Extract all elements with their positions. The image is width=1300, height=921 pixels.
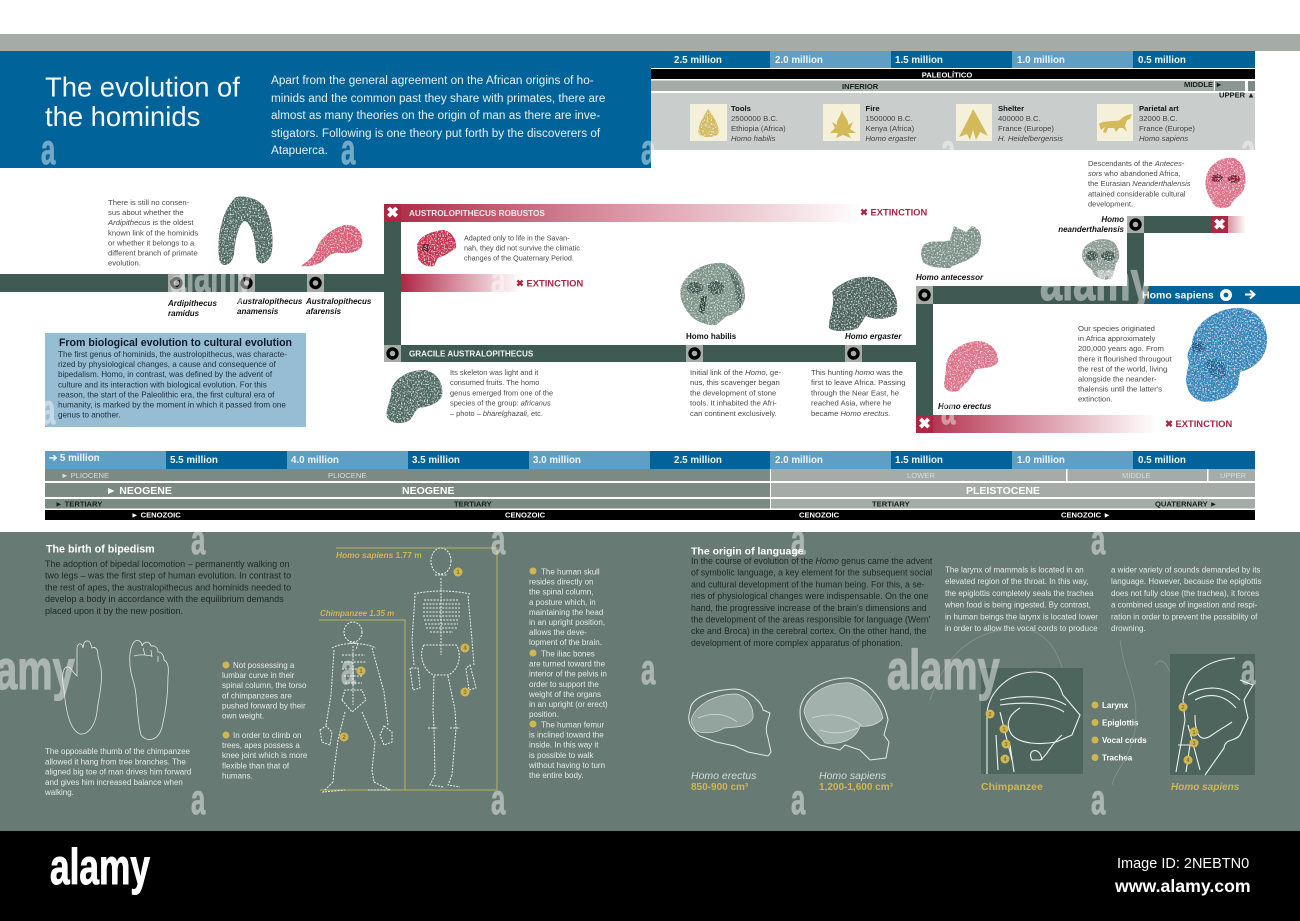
- text: bipedism intro: two legs – was the first step of human evolution. In contrast to: [45, 571, 291, 581]
- text: neanderthal note: Descendants of the Anteces-: [1088, 159, 1184, 168]
- text: chimpanzee notes: pushed forward by their: [222, 701, 306, 710]
- label: homo sapiens diagram: Homo sapiens: [1171, 782, 1240, 793]
- cenozoic row: CENOZOIC: [799, 510, 840, 520]
- text: robustos note: Adapted only to life in the Savan-: [464, 234, 570, 242]
- text: homo ergaster note: became Homo erectus.: [811, 409, 890, 418]
- text: human skeleton notes: a posture which, in: [529, 598, 596, 607]
- callouts: skeleton numbered markers: 1: [359, 669, 363, 675]
- text: human skeleton notes: interior of the pelvis in: [529, 670, 607, 679]
- watermark marks: a: [191, 515, 206, 564]
- text: homo sapiens note: Our species originated: [1078, 324, 1155, 333]
- title: The evolution of: [45, 72, 240, 102]
- illustration: homo sapiens brain: [800, 678, 889, 760]
- skull: robustus: [417, 230, 456, 267]
- extinction branch: robustos: [384, 204, 927, 222]
- text: homo sapiens note: in Africa approximately: [1078, 334, 1155, 343]
- text: neanderthal note: development.: [1088, 199, 1133, 208]
- milestone text: fire: 1500000 B.C.: [866, 114, 913, 123]
- text: ardipithecus note: known link of the hominids: [108, 228, 198, 237]
- intro text: minids and the common past they share with primates, there are: [271, 92, 606, 105]
- label: homo antecessor: Homo antecessor: [916, 273, 984, 282]
- text: ardipithecus note: sus about whether the: [108, 208, 184, 217]
- text: larynx column one: in order to allow the vocal cords to produce: [945, 624, 1098, 633]
- label: homo neanderthalensis: neanderthalensis: [1058, 225, 1125, 234]
- period row: [45, 483, 1255, 497]
- skull: homo erectus: [944, 341, 998, 392]
- text: chimpanzee notes: In order to climb on: [233, 731, 301, 740]
- label: homo sapiens height: Homo sapiens 1.77 m: [336, 550, 422, 560]
- legend: larynx parts: Larynx: [1102, 701, 1129, 710]
- text: larynx column one: in human beings the larynx is located lower: [945, 612, 1098, 621]
- text: homo sapiens note: there it flourished througout: [1078, 354, 1172, 363]
- illustration: homo sapiens vocal tract: 3: [1192, 741, 1196, 747]
- callouts: skeleton numbered markers: 4: [463, 646, 467, 652]
- period row: NEOGENE: [402, 485, 455, 497]
- label: ardipithecus ramidus: ramidus: [168, 309, 200, 318]
- milestone text: fire: Kenya (Africa): [866, 124, 915, 133]
- text: homo habilis note: Initial link of the Homo, ge-: [690, 368, 781, 377]
- illustration: chimpanzee hand and human foot: [63, 640, 168, 740]
- skull: neanderthal red: [1205, 158, 1246, 208]
- panel: from biological evolution to cultural evolution: rized by physiological changes, a cause and consequence of: [58, 360, 277, 369]
- watermark marks: a: [791, 515, 806, 564]
- watermark marks: a: [941, 385, 956, 434]
- cenozoic row: [45, 510, 1255, 520]
- watermark marks: a: [641, 645, 656, 694]
- panel: from biological evolution to cultural evolution: culture and its interaction with biological evolution. For this: [58, 380, 267, 389]
- text: chimpanzee notes: of chimpanzees are: [222, 691, 292, 700]
- illustration: homo sapiens vocal tract: 4: [1186, 758, 1190, 764]
- top time scale: 2.5 million: [674, 55, 722, 66]
- extinction branch: homo erectus: ✖: [918, 416, 931, 432]
- illustration: homo sapiens vocal tract: 1: [1192, 730, 1196, 736]
- evolution tree lines: [0, 204, 1300, 416]
- icon: shelter: [956, 104, 992, 141]
- label: australopithecus afarensis: afarensis: [306, 307, 342, 316]
- label: australopithecus anamensis: Australopithecus: [236, 297, 303, 306]
- epoch row: [45, 469, 1255, 481]
- callouts: skeleton numbered markers: 3: [463, 690, 467, 696]
- epoch row: ► PLIOCENE: [61, 471, 109, 480]
- text: larynx column two: does not fully close (the trachea), it forces: [1111, 589, 1259, 598]
- epoch row: UPPER: [1220, 471, 1247, 480]
- era row: ► TERTIARY: [55, 500, 102, 508]
- text: hand and foot caption: The opposable thumb of the chimpanzee: [45, 747, 191, 756]
- panel: bottom background: [0, 532, 1300, 831]
- text: human skeleton notes: is possible to walk: [529, 751, 594, 760]
- milestone text: shelter: H. Heidelbergensis: [998, 134, 1063, 143]
- panel: from biological evolution to cultural evolution: reason, the start of the Paleolithic era, the first cultural era of: [58, 390, 275, 399]
- bottom time scale: 1.0 million: [1017, 455, 1065, 466]
- illustration: homo erectus brain: [689, 689, 771, 756]
- milestone text: parietal art: France (Europe): [1139, 124, 1195, 133]
- label: homo ergaster: Homo ergaster: [845, 332, 902, 341]
- extinction branch: homo erectus: [916, 415, 1232, 433]
- illustration: homo sapiens vocal tract: [1112, 640, 1255, 785]
- extinction branch: early australopithecus: ✖ EXTINCTION: [516, 278, 583, 288]
- epoch row: LOWER: [907, 471, 935, 480]
- panel: cultural milestones: [651, 90, 1255, 150]
- milestone text: tools: 2500000 B.C.: [731, 114, 778, 123]
- text: hand and foot caption: and gives him increased balance when: [45, 778, 183, 787]
- legend: larynx parts: Epiglottis: [1102, 718, 1139, 728]
- legend: larynx parts: Trachea: [1102, 754, 1133, 762]
- icon: parietal art: [1097, 104, 1133, 141]
- epoch row: MIDDLE: [1122, 471, 1151, 480]
- text: larynx column two: language. However, because the epiglottis: [1111, 577, 1261, 586]
- bottom time scale: 3.0 million: [533, 455, 581, 466]
- bottom time scale: ➔ 5 million: [49, 453, 100, 464]
- extinction branch: robustos: ✖: [386, 204, 399, 222]
- text: homo habilis note: tools. It inhabited the Afri-: [690, 399, 777, 408]
- label: homo sapiens on timeline: Homo sapiens: [1142, 290, 1214, 302]
- title: the hominids: [45, 101, 200, 132]
- text: larynx column two: ration in order to prevent the possibility of: [1111, 612, 1258, 621]
- watermark marks: a: [341, 125, 356, 174]
- watermark marks: a: [1241, 645, 1256, 694]
- text: bipedism intro: The adoption of bipedal locomotion – permanently walking on: [45, 559, 290, 569]
- text: human skeleton notes: is inclined toward the: [529, 731, 604, 740]
- heading: the birth of bipedism: The birth of bipedism: [46, 544, 155, 556]
- text: human skeleton notes: [528, 568, 608, 780]
- label: homo erectus capacity: Homo erectus: [691, 770, 757, 782]
- illustration: chimpanzee vocal tract: 3: [1004, 742, 1008, 748]
- panel: cultural milestones: UPPER ▲: [1219, 90, 1255, 100]
- watermark marks: a: [1241, 125, 1256, 174]
- text: homo habilis note: nus, this scavenger began: [690, 378, 780, 387]
- text: human skeleton notes: order to support the: [529, 680, 599, 689]
- watermark marks: alamy: [1040, 250, 1153, 313]
- text: larynx column one: the epiglottis completely seals the trachea: [945, 589, 1094, 598]
- text: language intro: In the course of evolution of the Homo genus came the advent: [691, 556, 932, 566]
- text: larynx column one: when food is being ingested. By contrast,: [944, 601, 1091, 610]
- text: chimpanzee notes: lumbar curve in their: [222, 671, 295, 680]
- bottom time scale: 2.5 million: [674, 455, 722, 466]
- text: human skeleton notes: The iliac bones: [541, 650, 595, 658]
- text: homo ergaster note: through the Near East, he: [811, 388, 899, 397]
- text: neanderthal note: the Eurasian Neanderthalensis: [1088, 179, 1191, 188]
- text: larynx column one: elevated region of the throat. In this way,: [945, 577, 1088, 586]
- text: gracile note: – photo – bharelghazali, etc.: [450, 409, 543, 418]
- watermark marks: a: [191, 775, 206, 824]
- milestone text: tools: Ethiopia (Africa): [731, 124, 786, 133]
- illustration: chimpanzee vocal tract: [930, 629, 1083, 774]
- skull: gracile: [387, 370, 442, 423]
- milestone text: parietal art: 32000 B.C.: [1139, 114, 1177, 123]
- epoch row: PLIOCENE: [328, 471, 366, 480]
- watermark marks: a: [41, 385, 56, 434]
- label: homo habilis: Homo habilis: [686, 332, 737, 341]
- text: human skeleton notes: the entire body.: [529, 771, 584, 780]
- text: human skeleton notes: inside. In this way it: [529, 741, 599, 750]
- illustration: chimpanzee vocal tract: 1: [1002, 727, 1006, 733]
- watermark marks: a: [341, 645, 356, 694]
- text: homo sapiens note: 200,000 years ago. From: [1078, 344, 1164, 353]
- illustration: chimpanzee skeleton: [320, 622, 392, 792]
- text: chimpanzee notes: spinal column, the torso: [222, 681, 307, 690]
- text: gracile note: species of the group: africanus: [450, 399, 551, 408]
- top time scale: 2.0 million: [775, 55, 823, 66]
- milestone text: shelter: Shelter: [998, 104, 1024, 113]
- panel: from biological evolution to cultural evolution: From biological evolution to cultural evolution: [59, 337, 292, 349]
- label: chimpanzee diagram: Chimpanzee: [981, 781, 1043, 793]
- text: neanderthal note: attained considerable cultural: [1088, 189, 1186, 198]
- panel: from biological evolution to cultural evolution: bipedalism. Homo, in contrast, was defined by the advent of: [58, 370, 273, 379]
- text: human skeleton notes: resides directly on: [529, 578, 593, 587]
- label: homo erectus capacity: 850-900 cm³: [691, 782, 749, 793]
- watermark marks: a: [1091, 515, 1106, 564]
- text: chimpanzee notes: flexible than that of: [222, 761, 290, 770]
- bottom time scale: 2.0 million: [775, 455, 823, 466]
- bottom time scale: 0.5 million: [1138, 455, 1186, 466]
- text: human skeleton notes: weight of the organs: [528, 690, 601, 699]
- text: homo ergaster note: first to leave Africa. Passing: [811, 378, 905, 387]
- icon: fire: [823, 104, 860, 141]
- text: language intro: development of more complex apparatus of phonation.: [691, 638, 903, 648]
- text: language intro: ries of physiological changes were indispensable. On the one: [691, 591, 929, 601]
- text: gracile note: Its skeleton was light and it: [450, 368, 538, 377]
- milestone text: fire: Fire: [866, 104, 880, 113]
- watermark marks: [0, 125, 1256, 824]
- label: homo sapiens capacity: [819, 770, 894, 793]
- label: ardipithecus ramidus: Ardipithecus: [167, 299, 217, 308]
- text: homo sapiens note: extinction.: [1078, 395, 1113, 404]
- extinction branch: early australopithecus: [401, 274, 583, 292]
- text: gracile note: genus emerged from one of the: [450, 388, 553, 397]
- text: homo ergaster note: This hunting homo was the: [811, 368, 903, 377]
- text: robustos note: changes of the Quaternary Period.: [464, 254, 574, 262]
- text: human skeleton notes: are turned toward the: [529, 660, 606, 669]
- skull: homo neanderthalensis grey: [1082, 239, 1119, 280]
- text: larynx column one: The larynx of mammals is located in an: [945, 566, 1084, 574]
- bottom time scale: 4.0 million: [291, 455, 339, 466]
- text: language intro: cke and Broca) in the cerebral cortex. On the other hand, the: [691, 626, 927, 636]
- top time scale: [651, 51, 1255, 91]
- text: hand and foot caption: walking.: [44, 788, 74, 797]
- text: language intro: hand, the progressive increase of the brain's dimensions and: [691, 603, 927, 613]
- text: hand and foot caption: allowed it hang from tree branches. The: [45, 757, 186, 766]
- watermark marks: a: [41, 125, 56, 174]
- text: ardipithecus note: evolution.: [108, 259, 141, 268]
- label: homo neanderthalensis: Homo: [1101, 215, 1124, 224]
- callouts: skeleton numbered markers: 1: [456, 570, 460, 576]
- text: bipedism intro: placed upon it by the new position.: [45, 606, 183, 616]
- text: homo sapiens note: alongside the neander-: [1078, 374, 1157, 384]
- text: bipedism intro: the rest of apes, the australopithecus and hominids needed to: [45, 582, 291, 592]
- callouts: skeleton numbered markers: 2: [342, 735, 346, 741]
- text: ardipithecus note: different branch of primate: [108, 248, 198, 258]
- text: hand and foot caption: aligned big toe of man drives him forward: [45, 768, 191, 777]
- panel: from biological evolution to cultural evolution: [45, 333, 306, 427]
- text: human skeleton notes: allows the deve-: [529, 628, 587, 637]
- era row: QUATERNARY ►: [1155, 500, 1217, 508]
- text: chimpanzee notes: [222, 661, 308, 780]
- label: homo sapiens capacity: Homo sapiens: [819, 770, 887, 782]
- text: language intro: and cultural development of the human being. For this, a se-: [691, 579, 925, 589]
- footer image id: Image ID: 2NEBTN0: [1117, 856, 1249, 872]
- milestone text: parietal art: Homo sapiens: [1139, 134, 1188, 143]
- label: homo sapiens capacity: 1,200-1,600 cm³: [819, 782, 894, 793]
- top time scale: PALEOLÍTICO: [922, 70, 972, 80]
- intro text: stigators. Following is one theory put forth by the discoverers of: [271, 127, 601, 140]
- watermark marks: a: [641, 125, 656, 174]
- text: human skeleton notes: The human skull: [541, 568, 600, 576]
- text: human skeleton notes: in an upright position,: [529, 618, 605, 627]
- watermark marks: alamy: [170, 247, 252, 303]
- text: language intro: of symbolic language, a key element for the subsequent social: [691, 568, 932, 578]
- intro text: Apart from the general agreement on the African origins of ho-: [271, 74, 594, 87]
- top time scale: INFERIOR: [842, 82, 879, 91]
- text: chimpanzee notes: trees, apes possess a: [222, 741, 300, 750]
- label: homo erectus capacity: [691, 770, 757, 793]
- fossil: afarensis jaw: [301, 225, 362, 266]
- fossil: ardipithecus jaw: [218, 196, 273, 265]
- milestone text: parietal art: Parietal art: [1139, 104, 1179, 113]
- text: human skeleton notes: position.: [529, 710, 559, 719]
- fossil: homo antecessor: [921, 226, 981, 268]
- watermark marks: a: [491, 775, 506, 824]
- text: homo ergaster note: reached Asia, where he: [811, 399, 891, 408]
- extinction branch: homo erectus: ✖ EXTINCTION: [1165, 418, 1232, 429]
- skull: homo sapiens blue: [1186, 308, 1267, 402]
- bottom time scale: [45, 451, 1255, 520]
- text: human skeleton notes: maintaining the head: [529, 608, 603, 617]
- skull: homo ergaster: [829, 277, 897, 331]
- text: larynx column two: a combined usage of ingestion and respi-: [1111, 601, 1258, 610]
- milestone text: shelter: 400000 B.C.: [998, 114, 1041, 123]
- illustration: chimpanzee vocal tract: 2: [988, 712, 992, 718]
- extinction branch: robustos: AUSTROLOPITHECUS ROBUSTOS: [409, 209, 545, 218]
- milestone text: fire: Homo ergaster: [866, 134, 917, 143]
- callouts: skeleton numbered markers: [340, 568, 470, 742]
- panel: from biological evolution to cultural evolution: humanity, is marked by the moment in which it passed from one: [58, 400, 286, 410]
- panel: from biological evolution to cultural evolution: genus to another.: [58, 411, 121, 420]
- period row: PLEISTOCENE: [966, 485, 1040, 497]
- label: homo erectus: Homo erectus: [938, 402, 992, 411]
- footer bar: [0, 831, 1300, 921]
- skull: homo habilis: [680, 263, 745, 325]
- top grey band: [0, 34, 1300, 51]
- watermark marks: a: [491, 255, 506, 304]
- text: larynx column two: drowning.: [1111, 624, 1146, 633]
- milestone text: tools: Homo habilis: [731, 134, 776, 143]
- label: australopithecus afarensis: Australopithecus: [305, 297, 372, 306]
- text: human skeleton notes: in an upright (or erect): [529, 700, 608, 709]
- watermark marks: a: [791, 775, 806, 824]
- watermark marks: alamy: [887, 639, 1000, 702]
- text: homo habilis note: can continent exclusively.: [690, 409, 777, 418]
- text: robustos note: nah, they did not survive the climatic: [464, 244, 580, 252]
- label: homo sapiens on timeline: [1142, 290, 1254, 302]
- legend: larynx parts: [1092, 701, 1147, 762]
- bottom time scale: 1.5 million: [895, 455, 943, 466]
- cenozoic row: ► CENOZOIC: [131, 510, 181, 520]
- text: human skeleton notes: lopment of the brain.: [529, 638, 602, 647]
- timeline nodes: [168, 216, 1230, 362]
- cenozoic row: CENOZOIC ►: [1061, 510, 1111, 520]
- text: human skeleton notes: without having to turn: [528, 761, 605, 770]
- text: chimpanzee notes: knee joint which is more: [222, 751, 308, 760]
- icon: tools: [690, 104, 727, 141]
- intro text: Atapuerca.: [271, 144, 328, 157]
- top time scale: MIDDLE ►: [1184, 80, 1223, 89]
- text: ardipithecus note: or whether it belongs to a: [108, 238, 195, 247]
- text: chimpanzee notes: humans.: [222, 771, 253, 780]
- text: bipedism intro: develop a body in accordance with the equilibrium demands: [45, 594, 284, 604]
- top time scale: 0.5 million: [1138, 55, 1186, 66]
- chart: height comparison lines: [319, 548, 497, 790]
- text: chimpanzee notes: Not possessing a: [233, 661, 295, 670]
- text: homo sapiens note: the rest of the world, living: [1078, 364, 1167, 373]
- milestone text: tools: Tools: [731, 104, 751, 113]
- footer logo: alamy: [50, 840, 150, 896]
- watermark marks: a: [1091, 775, 1106, 824]
- header panel: [0, 51, 651, 168]
- legend: larynx parts: Vocal cords: [1102, 736, 1147, 745]
- extinction branch: neanderthal: [1211, 216, 1246, 234]
- label: chimpanzee height: Chimpanzee 1.35 m: [320, 609, 394, 618]
- era row: [45, 499, 1255, 508]
- era row: TERTIARY: [872, 500, 910, 508]
- text: gracile note: consumed fruits. The homo: [450, 378, 539, 387]
- illustration: human skeleton: [410, 548, 476, 787]
- top time scale: 1.0 million: [1017, 55, 1065, 66]
- heading: gracile australopithecus: GRACILE AUSTRALOPITHECUS: [409, 350, 534, 358]
- extinction branch: neanderthal: ✖: [1213, 216, 1226, 234]
- text: human skeleton notes: the spinal column,: [529, 588, 593, 597]
- cenozoic row: CENOZOIC: [505, 510, 546, 520]
- watermark marks: a: [491, 515, 506, 564]
- text: human skeleton notes: The human femur: [541, 720, 604, 730]
- footer website: www.alamy.com: [1114, 876, 1251, 896]
- bottom time scale: 5.5 million: [170, 455, 218, 466]
- text: language intro: the development of the areas responsible for language (Wern': [691, 614, 931, 624]
- text: homo sapiens note: thalensis until the latter's: [1078, 385, 1162, 394]
- period row: ► NEOGENE: [106, 485, 172, 497]
- panel: from biological evolution to cultural evolution: The first genus of hominids, the austrolopithecus, was characte-: [58, 350, 287, 359]
- text: larynx column two: a wider variety of sounds demanded by its: [1111, 566, 1260, 574]
- watermark marks: a: [941, 125, 956, 174]
- text: ardipithecus note: There is still no consen-: [108, 198, 190, 207]
- illustration: homo sapiens vocal tract: 2: [1181, 705, 1185, 711]
- extinction branch: robustos: ✖ EXTINCTION: [860, 206, 927, 218]
- text: chimpanzee notes: own weight.: [222, 712, 264, 720]
- bottom time scale: 3.5 million: [412, 455, 460, 466]
- heading: the origin of language: The origin of language: [691, 546, 804, 558]
- text: homo habilis note: the development of stone: [690, 388, 776, 397]
- text: ardipithecus note: Ardipithecus is the oldest: [108, 218, 193, 227]
- milestone text: shelter: France (Europe): [998, 124, 1054, 133]
- label: australopithecus anamensis: anamensis: [237, 307, 279, 316]
- text: neanderthal note: sors who abandoned Africa,: [1088, 169, 1181, 178]
- era row: TERTIARY: [454, 500, 492, 508]
- intro text: almost as many theories on the origin of man as there are inve-: [271, 109, 600, 122]
- top time scale: 1.5 million: [895, 55, 943, 66]
- illustration: chimpanzee vocal tract: 4: [1003, 757, 1007, 763]
